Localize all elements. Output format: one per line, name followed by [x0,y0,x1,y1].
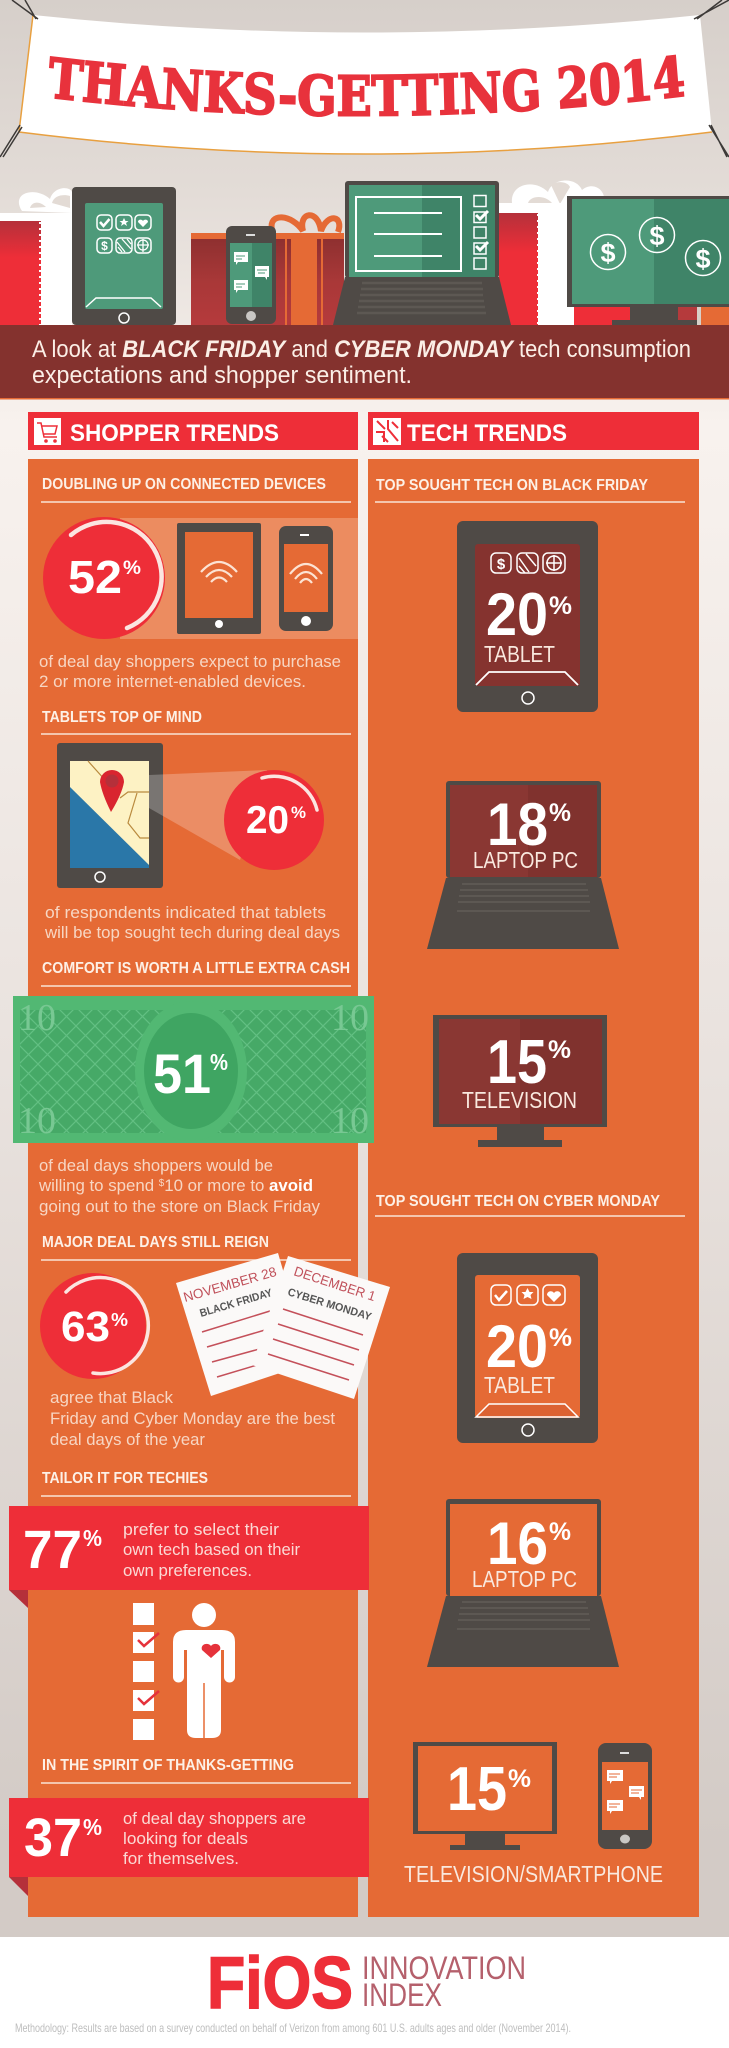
ribbon 77%: prefer to select their [123,1520,279,1539]
panel: shopper trends [28,459,358,1917]
comfort body text: $ [159,1178,165,1189]
stat: 52% [43,517,165,639]
dollar bill 51%: % [210,1049,228,1075]
ribbon 77%: own tech based on their [123,1540,300,1559]
gift scene with devices [0,180,729,325]
cyber monday smartphone [598,1743,652,1849]
stat: 63%: 63 [61,1303,110,1351]
panel: tech trends: TELEVISION/SMARTPHONE [404,1861,663,1887]
tablets top of mind section: of respondents indicated that tablets [45,903,326,922]
black friday laptop 18% [427,781,619,949]
tailor section heading: TAILOR IT FOR TECHIES [42,1470,208,1487]
tech trends header [368,412,699,450]
doubling up section [39,476,358,691]
doubling up section: 2 or more internet-enabled devices. [39,672,306,691]
cyber monday laptop 16%: LAPTOP PC [472,1566,577,1592]
footer [0,1937,729,2048]
logo [207,1943,526,2024]
cyber monday tablet 20% [457,1253,598,1443]
ribbon 77% [9,1506,369,1608]
laptop with checklist [333,181,511,325]
ribbon 37%: for themselves. [123,1849,239,1868]
cyber monday television 15%: 15 [447,1755,507,1824]
black friday tablet 20%: 20 [486,581,548,648]
doubling up section: DOUBLING UP ON CONNECTED DEVICES [42,476,326,493]
icon: cart [34,418,61,445]
black friday television 15% [433,1015,607,1147]
dollar bill 51%: 51 [153,1042,211,1105]
title: THANKS-GETTING 2014 [49,54,684,117]
black friday tablet 20%: TABLET [484,641,555,667]
black friday heading: TOP SOUGHT TECH ON BLACK FRIDAY [376,477,648,494]
ribbon 77%: % [83,1525,102,1551]
black friday laptop 18%: 18 [487,791,548,858]
calendar page: december 1: CYBER MONDAY [286,1286,373,1323]
black friday television 15%: % [548,1036,571,1064]
black friday television 15%: 15 [487,1028,547,1097]
dollar bill 51% [13,996,374,1143]
middle gift [191,215,344,325]
stat: 63%: % [111,1310,128,1330]
tablets top of mind section: will be top sought tech during deal days [44,923,340,942]
calendar page: december 1 [252,1256,390,1399]
comfort body text: of deal days shoppers would be [39,1156,273,1175]
comfort body text: 10 or more to [164,1176,269,1195]
black friday television 15%: TELEVISION [462,1087,577,1113]
stat: 52%: 52 [68,551,122,603]
major deal days section: agree that Black [50,1388,173,1407]
calendar page: december 1: DECEMBER 1 [292,1264,378,1304]
cyber monday tablet 20%: % [549,1324,572,1352]
cyber monday television 15% [413,1742,557,1850]
cyber monday tablet 20%: TABLET [484,1372,555,1398]
dollar bill 51%: 10 [18,997,56,1039]
black friday tablet 20%: % [549,592,572,620]
cyber monday laptop 16%: % [549,1518,571,1546]
stat: 20% [224,770,324,870]
subtitle band [0,325,729,400]
doubling up section: of deal day shoppers expect to purchase [39,652,341,671]
ribbon 77%: own preferences. [123,1561,252,1580]
comfort body text [38,1156,320,1216]
stat: 20%: % [291,803,306,822]
subtitle band: A look at BLACK FRIDAY and CYBER MONDAY tech consumption [32,336,691,363]
icon: tablet map [57,743,163,888]
left gift [0,188,72,325]
major deal days section [40,1234,351,1449]
television with dollars [567,196,729,325]
spotlight beam [149,770,267,860]
calendar page: november 28: BLACK FRIDAY [198,1287,274,1320]
major deal days section: Friday and Cyber Monday are the best [50,1409,335,1428]
ribbon 37%: of deal day shoppers are [123,1809,306,1828]
banner [0,0,729,158]
cyber monday laptop 16% [427,1499,619,1667]
phone with chat [226,226,276,324]
shopper trends header: SHOPPER TRENDS [70,420,279,447]
subtitle band: expectations and shopper sentiment. [32,362,412,389]
calendar page: november 28: NOVEMBER 28 [182,1264,278,1305]
black friday laptop 18%: LAPTOP PC [473,847,578,873]
logo: FiOS [207,1943,353,2024]
major deal days section: MAJOR DEAL DAYS STILL REIGN [42,1234,269,1251]
dollar bill 51%: 10 [18,1100,56,1142]
television with dollars: $ [695,244,711,274]
icon: phone wifi [279,526,333,631]
dollar bill 51%: 10 [331,1100,369,1142]
major deal days section: deal days of the year [50,1430,205,1449]
icon: checklist [133,1603,159,1740]
cyber monday laptop 16%: 16 [487,1510,548,1577]
tablets top of mind section [41,709,351,942]
television with dollars: $ [649,221,665,251]
logo: INDEX [362,1977,442,2013]
cyber monday heading: TOP SOUGHT TECH ON CYBER MONDAY [376,1193,660,1210]
stat: 20%: 20 [246,799,289,842]
right gift [499,180,729,325]
tablet with apps [72,187,176,325]
spirit section heading: IN THE SPIRIT OF THANKS-GETTING [42,1757,294,1774]
comfort section heading: COMFORT IS WORTH A LITTLE EXTRA CASH [42,960,350,977]
shopper trends header [28,412,358,450]
calendar page: november 28 [176,1253,310,1396]
logo: INNOVATION [362,1950,526,1986]
icon: tablet wifi [177,523,261,634]
dollar bill 51%: 10 [331,997,369,1039]
ribbon 37%: 37 [24,1808,82,1868]
ribbon 37%: looking for deals [123,1829,248,1848]
ribbon 37%: % [83,1814,102,1840]
cyber monday tablet 20%: 20 [486,1313,548,1380]
black friday tablet 20% [457,521,598,712]
stat: 52%: % [123,558,141,579]
cyber monday television 15%: % [508,1765,531,1793]
ribbon 77%: 77 [23,1520,82,1580]
comfort body text: avoid [269,1176,313,1195]
tablets top of mind section: TABLETS TOP OF MIND [42,709,202,726]
stat: 63% [40,1273,148,1379]
panel: tech trends [368,459,699,1917]
television with dollars: $ [600,238,616,268]
icon: person with heart [173,1603,235,1738]
ribbon 37% [9,1798,369,1896]
black friday tablet 20%: $ [497,556,506,573]
tech trends header: TECH TRENDS [407,420,567,447]
comfort body text: willing to spend [39,1176,155,1195]
black friday laptop 18%: % [549,799,571,827]
comfort body text: going out to the store on Black Friday [39,1197,320,1216]
tablet with apps: $ [101,239,108,253]
icon: tech [373,418,401,445]
